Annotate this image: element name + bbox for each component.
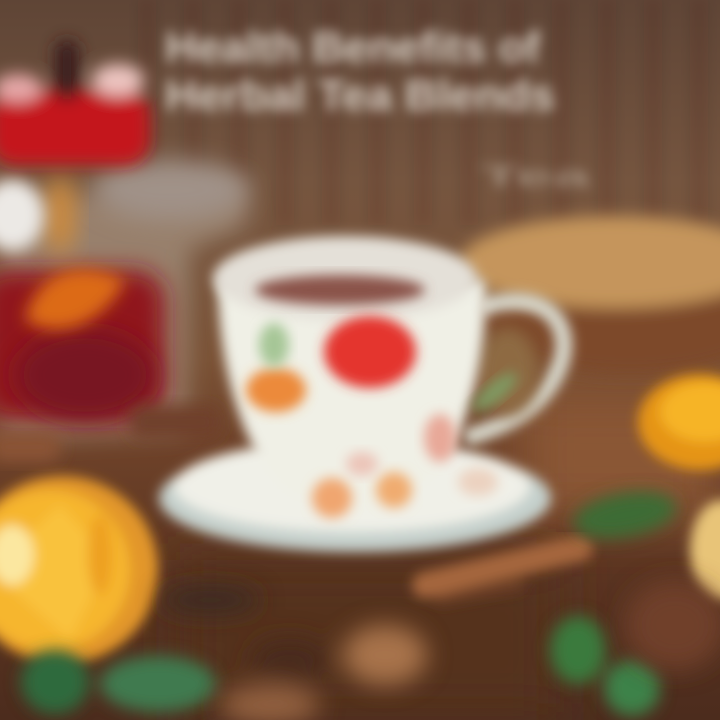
tea surface: [255, 275, 425, 305]
jar of red tea: [0, 160, 250, 462]
green motif: [259, 323, 289, 367]
tea in jar: [0, 270, 165, 420]
title: [165, 23, 591, 193]
cinnamon sticks: [425, 548, 580, 600]
saucer: [159, 440, 551, 552]
tea cup: [213, 236, 564, 518]
title: Herbal Tea Blends: [165, 71, 555, 120]
white cap: [0, 179, 44, 251]
handle: [465, 301, 564, 438]
orange motif: [246, 368, 306, 412]
cream slice right: [690, 500, 720, 600]
orange slice left: [0, 476, 158, 664]
lower motifs: [312, 478, 352, 518]
cup body: [218, 280, 485, 509]
jar glass: [0, 180, 250, 440]
title: Health Benefits of: [165, 23, 540, 72]
bowl: [460, 216, 720, 375]
red flower: [324, 316, 416, 388]
green leaves: [21, 484, 680, 716]
green motif right: [468, 367, 522, 417]
orange in jar: [25, 269, 125, 329]
title: Tea: [480, 160, 591, 193]
orange slice right: [638, 374, 720, 470]
spices and nuts: [160, 580, 720, 720]
pink motif: [424, 414, 456, 462]
red lid object: [0, 40, 150, 165]
cup rim: [213, 236, 477, 320]
